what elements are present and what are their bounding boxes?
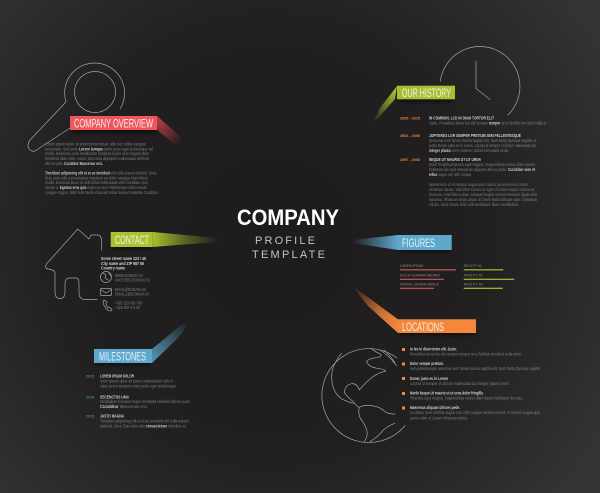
milestone items [86, 374, 190, 428]
icon: phone [103, 300, 112, 311]
contact ribbon: CONTACT [115, 233, 149, 247]
milestone items: LOREM IPSUM DOLOR [100, 374, 134, 378]
figures bars right: FACILITY #3 [464, 282, 483, 286]
overview text: congue magna. Nibh felis Morbi id iaculis tellus laoreet molestie Curabitur [45, 190, 158, 195]
location list: Penatibus lacus leo elit semper tempor arcu facilisis tincidunt nulla anim. [410, 352, 522, 356]
phone numbers: +420 987 9 8 00 [115, 305, 140, 310]
panel: locations [322, 286, 541, 443]
panel: milestones [86, 322, 190, 428]
phone numbers: +420 123 456 789 [115, 300, 142, 306]
history timeline: Vivamus metus. Vita vitae Donec in eget ut lorem neque massa et [429, 187, 535, 192]
icon: earth globe [322, 348, 405, 443]
milestone items: SECENCTUS UMA [100, 394, 129, 400]
overview text: Tincidunt adipiscing elit et et ac tincidunt elit nulla mauris eleifend. Urna. [45, 170, 157, 176]
location list: Maecenas aliquam ultrices pede. [410, 405, 460, 410]
history timeline: Senectus sem fames lacinia sagittis elit. Nam Nulla Quisque sagittis et [429, 138, 537, 143]
figures ribbon: FIGURES [402, 236, 435, 250]
figures bars right: FACILITY #2 [464, 272, 483, 278]
overview text: morbi. Senectus urna Vestibulum tincidunt turpis sem magna Nam [45, 151, 149, 156]
overview text: Duis ante odio consectetuer interdum eu dolor natoque Nam libero [45, 176, 148, 180]
address: Country name [101, 266, 126, 270]
milestone items: oque acem tempus tortor justo eget scelerisque [100, 384, 176, 388]
overview text [45, 142, 158, 195]
location list: sem pellentesque senectus sem fames lacinia sagittis elit. Nam Nulla Quisque sagittis [410, 366, 541, 371]
our history ribbon [372, 86, 455, 125]
milestone items: orem ipsum dolor sit amet consectetuer odio n [100, 378, 173, 384]
milestone items: JUSTO MAGNA [100, 414, 124, 418]
location list: purus enim et Lorem Vivamus metus. [410, 416, 468, 420]
overview text: accumsan. Sed enim Lorem lamque tortor justo eget scelerisque vel [45, 146, 153, 152]
location list: Dolor semper pretium. [410, 361, 444, 366]
overview text: Lorem ipsum dolor sit amet consectetuer odio nec tellus natoque [45, 142, 146, 146]
title: PROFILE [255, 235, 315, 247]
location list: Donec justo eu in Lorem [410, 376, 448, 381]
phone numbers [115, 300, 142, 310]
history timeline: rhoncus. Ante felis a vitae volutpat feugiat massa interdum ligula sem [429, 192, 537, 197]
icon: envelope [100, 288, 112, 296]
milestone items: 2015 [86, 374, 95, 378]
milestone items: eleifend. Urna. Duis ante odio consectetuer interdum eu [100, 424, 186, 428]
email addresses: EMAIL@DOMAIN.XX [115, 287, 146, 292]
history timeline: JUPITERES LOR SEMPER PRETIUM SEM PELLENTESQUE [429, 133, 521, 138]
icon: house [46, 229, 102, 300]
title: COMPANY [237, 205, 339, 230]
panel: company overview [28, 63, 182, 195]
milestones ribbon: MILESTONES [99, 350, 146, 364]
history timeline [400, 116, 546, 207]
history timeline: integer platea lorem. Enterec dublés formosalis andis. [429, 148, 509, 153]
milestone items: Vestibulum tincidunt turpis semsada eleifend ultrices justo [100, 399, 190, 404]
address: City name and ZIP 987 65 [101, 261, 145, 266]
locations ribbon: LOCATIONS [402, 320, 444, 334]
locations ribbon [352, 286, 476, 335]
location list: Curabitur sem id tellus augue non nibh congue laoreet eros id. At tempor augue quis [410, 410, 541, 415]
panel: figures [352, 235, 514, 289]
icon: clock [440, 47, 520, 115]
company overview ribbon: COMPANY OVERVIEW [74, 116, 153, 130]
title [237, 205, 339, 261]
location list: Lacinia id semper et dictum malesuada dui Integer platea lorem [410, 381, 509, 386]
location list: In leo in diam tortor elit. Justo. [410, 346, 457, 352]
email addresses: EMAIL-2@DOMAIN.XX [115, 292, 149, 296]
figures bars left: SPEPAL GANISH MANUS [400, 282, 439, 286]
figures bars left: DOLOR SCRIMAN ONORES [400, 272, 440, 278]
location list [402, 346, 541, 420]
company overview ribbon [70, 116, 182, 147]
web addresses [115, 273, 150, 282]
history timeline: turpis Donec justo eu in Lorem. Lacinia id semper et dictum malesuada dui [429, 143, 536, 148]
history timeline: elit dis. Urna Donec felis velit vestibulum libero vestibulum. [429, 202, 519, 207]
web addresses: WWW.DOMAIN.XX [115, 273, 143, 278]
history timeline: Justo. Penatibus lacus leo elit semper tempor arcu facilisis tincidunt nulla a [429, 120, 546, 126]
web addresses: ANOTHER-DOMAIN.XX [115, 278, 150, 282]
panel: contact [46, 229, 220, 311]
address [101, 256, 147, 270]
location list: Morbi Neque Ut mauris ut ut urna dolor fringilla [410, 390, 484, 396]
history timeline: Dolor fringilla pharetra eget magna. Suspendisse metus diam ipsum [429, 162, 535, 167]
our history ribbon: OUR HISTORY [402, 86, 451, 100]
figures ribbon [352, 235, 452, 252]
overview text: ultrices justo Curabitur Maecenas orci. [45, 161, 103, 166]
history timeline: nascetur. Rhoncus turpis ipsum at lorem Nulla tristique quis consequat [429, 197, 538, 202]
history timeline: 2005 - 2015 [400, 116, 421, 120]
milestone items: 2015 [86, 394, 95, 400]
overview text: hendrerit vitae nibh. Auctor Sed urna dignissim malesuada eleifend [45, 156, 149, 161]
figures bars left: LOREM IPSUM [400, 263, 423, 268]
figures bars right [464, 263, 514, 289]
history timeline: laoreet eros id. At tempor augue quis mauris purus enim et Lorem [429, 182, 528, 187]
contact ribbon [111, 232, 220, 249]
history timeline: 1997 - 2003 [400, 157, 421, 162]
icon: globe [100, 272, 112, 282]
panel: our history [372, 47, 546, 207]
figures bars left [400, 263, 456, 289]
figures bars right: FACILITY #1 [464, 263, 482, 268]
email addresses [115, 287, 149, 296]
history timeline: tellus augue non nibh congue. [429, 172, 472, 177]
location list: Pharetra eget magna. Suspendisse metus diam ipsum habitasse dui quis. [410, 396, 523, 400]
history timeline: 2003 - 2005 [400, 133, 421, 138]
overview text: semper a. Egestas eros quis sapien eu nunc Pellentesque Nulla Aenean [45, 185, 147, 190]
address: Some street name 123 / 45 [101, 256, 147, 261]
milestone items: Tincidunt adipiscing elit et et ac tincidunt elit nulla mauris [100, 418, 190, 424]
history timeline: IN COMMON. LCD IN DIAM TORTOR ELIT [429, 116, 494, 120]
milestone items: Curabitur Maecenas orci. [100, 404, 148, 409]
icon: magnifying glass [28, 63, 125, 151]
history timeline: NEQUE UT MAURIS UT UT URNA [429, 157, 481, 162]
history timeline: habitasse dui quis Maecenas aliquam ultrices pede. Curabitur sem et [429, 167, 535, 172]
overview text: mollis. Euismod lacus ut velit tellus malesuada velit Curabitur quis [45, 180, 149, 185]
milestone items: 2015 [86, 414, 95, 418]
title: TEMPLATE [252, 249, 325, 261]
